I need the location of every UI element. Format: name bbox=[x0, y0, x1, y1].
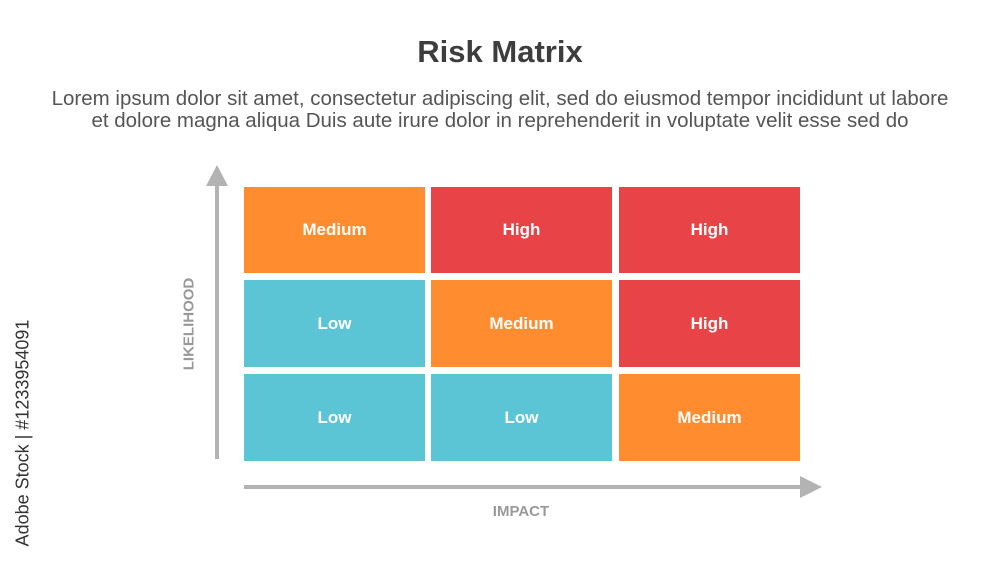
cell r1c2: High bbox=[503, 220, 540, 239]
cell r1c2 bbox=[431, 187, 612, 273]
cell r2c3: High bbox=[691, 314, 728, 332]
cell r3c3 bbox=[619, 374, 800, 461]
cell r3c2: Low bbox=[504, 408, 538, 426]
cell r3c2 bbox=[431, 374, 612, 461]
cell r3c1: Low bbox=[318, 408, 352, 426]
subtitle: et dolore magna aliqua Duis aute irure dolor in reprehenderit in voluptate velit esse sed do bbox=[91, 109, 909, 132]
cell r1c3: High bbox=[691, 220, 728, 239]
matrix bbox=[244, 187, 800, 461]
label: impact: IMPACT bbox=[493, 503, 549, 520]
cell r1c1: Medium bbox=[302, 220, 367, 239]
subtitle: Lorem ipsum dolor sit amet, consectetur adipiscing elit, sed do eiusmod tempor incididunt ut labore bbox=[52, 87, 948, 110]
label: likelihood: LIKELIHOOD bbox=[180, 278, 198, 370]
cell r1c1 bbox=[244, 187, 425, 273]
cell r2c2 bbox=[431, 280, 612, 367]
cell r2c3 bbox=[619, 280, 800, 367]
cell r2c2: Medium bbox=[489, 314, 554, 332]
watermark: Adobe Stock | #1233954091 bbox=[12, 320, 32, 546]
cell r3c3: Medium bbox=[677, 408, 742, 426]
subtitle bbox=[52, 87, 948, 132]
cell r2c1: Low bbox=[318, 314, 352, 332]
cell r2c1 bbox=[244, 280, 425, 367]
title: Risk Matrix bbox=[417, 34, 583, 69]
cell r1c3 bbox=[619, 187, 800, 273]
cell r3c1 bbox=[244, 374, 425, 461]
